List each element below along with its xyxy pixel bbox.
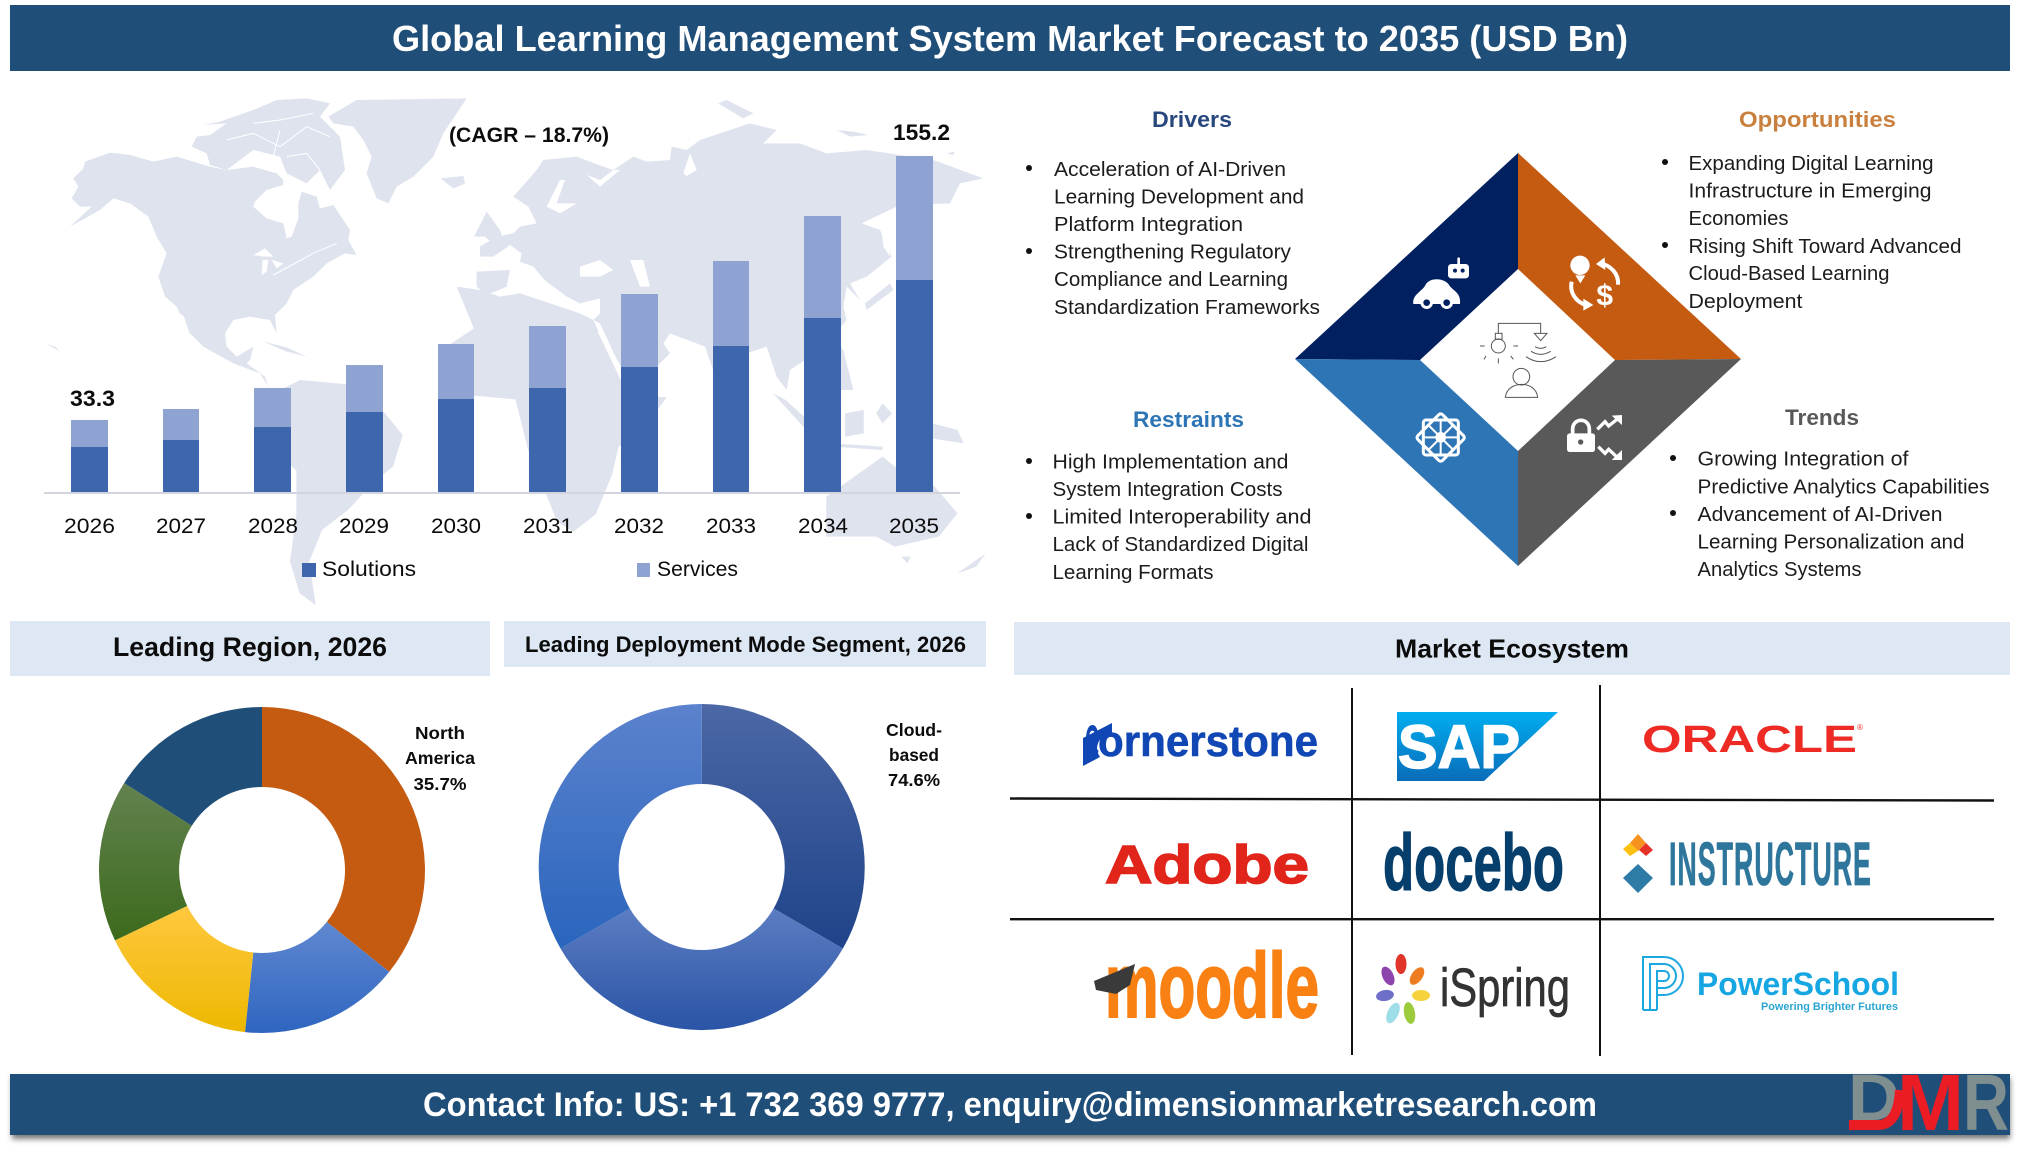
logo: DMR bbox=[1848, 1058, 2009, 1147]
logo: DMR: D bbox=[1848, 1060, 1900, 1134]
callout: cloud-based: based bbox=[889, 745, 939, 765]
trends block: Growing Integration of bbox=[1698, 448, 1909, 471]
restraints block: Learning Formats bbox=[1052, 561, 1214, 584]
year labels: 2026 bbox=[64, 514, 115, 538]
value label 2035: 155.2 bbox=[893, 120, 950, 145]
opportunities heading: Opportunities bbox=[1739, 107, 1896, 132]
CAGR label: (CAGR – 18.7%) bbox=[449, 123, 609, 147]
callout: cloud-based bbox=[886, 720, 942, 790]
callout: cloud-based: Cloud- bbox=[886, 720, 942, 740]
footer banner bbox=[10, 1058, 2010, 1147]
logo: powerschool: Powering Brighter Futures bbox=[1761, 1001, 1898, 1013]
logo: moodle bbox=[1094, 935, 1319, 1037]
panel: deployment mode bbox=[504, 621, 986, 1030]
drivers block: Strengthening Regulatory bbox=[1054, 241, 1292, 264]
year labels bbox=[64, 514, 939, 538]
panel: market ecosystem bbox=[1010, 622, 2010, 1056]
year labels: 2032 bbox=[614, 514, 664, 538]
icon: idea and money cycle: $ bbox=[1596, 279, 1613, 312]
year labels: 2027 bbox=[156, 514, 206, 538]
icon: lock and trend arrows bbox=[1567, 415, 1622, 460]
opportunities block: Expanding Digital Learning bbox=[1688, 152, 1934, 175]
heading: deployment mode: Leading Deployment Mode Segment, 2026 bbox=[525, 632, 966, 657]
drivers block bbox=[1026, 107, 1320, 319]
callout: North America: 35.7% bbox=[414, 774, 467, 794]
trends block: Learning Personalization and bbox=[1698, 530, 1964, 554]
drivers block: Compliance and Learning bbox=[1054, 268, 1288, 291]
icon: idea and money cycle bbox=[1570, 256, 1618, 312]
restraints heading: Restraints bbox=[1133, 407, 1244, 432]
logo: powerschool: PowerSchool bbox=[1697, 966, 1899, 1002]
logo: DMR: R bbox=[1963, 1058, 2009, 1147]
callout: North America: North bbox=[415, 723, 465, 743]
legend bbox=[302, 557, 738, 581]
year labels: 2035 bbox=[889, 514, 939, 538]
trends block: Analytics Systems bbox=[1698, 558, 1862, 581]
contact info: Contact Info: US: +1 732 369 9777, enquiry@dimensionmarketresearch.com bbox=[423, 1086, 1597, 1124]
year labels: 2030 bbox=[431, 514, 481, 538]
year labels: 2033 bbox=[706, 514, 756, 538]
logo: SAP: SAP bbox=[1398, 713, 1520, 781]
bars: solutions bbox=[71, 280, 933, 492]
callout: North America: America bbox=[405, 748, 475, 768]
donut chart: region bbox=[99, 707, 425, 1033]
restraints block: Lack of Standardized Digital bbox=[1052, 533, 1308, 556]
logo: ispring: iSpring bbox=[1440, 958, 1570, 1018]
opportunities block: Infrastructure in Emerging bbox=[1688, 180, 1932, 203]
restraints block: Limited Interoperability and bbox=[1052, 506, 1312, 529]
logo: ispring bbox=[1375, 954, 1570, 1025]
restraints block: System Integration Costs bbox=[1052, 478, 1282, 501]
drivers block: Acceleration of AI-Driven bbox=[1054, 158, 1286, 181]
restraints block: High Implementation and bbox=[1052, 450, 1288, 473]
opportunities block bbox=[1662, 107, 1962, 313]
legend: Services bbox=[657, 557, 738, 581]
logo: cornerstone: C bbox=[1085, 715, 1099, 771]
icon: robot car bbox=[1413, 257, 1469, 309]
panel: leading region bbox=[10, 621, 490, 1033]
drivers block: Standardization Frameworks bbox=[1054, 296, 1320, 319]
drivers block: Learning Development and bbox=[1054, 186, 1304, 208]
value label 2026: 33.3 bbox=[70, 386, 115, 411]
year labels: 2034 bbox=[798, 514, 848, 538]
logo: oracle: ® bbox=[1857, 723, 1863, 732]
trends heading: Trends bbox=[1785, 405, 1859, 430]
opportunities block: Economies bbox=[1688, 207, 1788, 230]
logo: oracle: ORACLE bbox=[1642, 719, 1857, 761]
logo: cornerstone: ornerstone bbox=[1098, 717, 1318, 766]
drivers block: Platform Integration bbox=[1054, 213, 1243, 236]
donut chart: deployment bbox=[539, 704, 865, 1030]
header banner bbox=[10, 5, 2010, 71]
title: Global Learning Management System Market Forecast to 2035 (USD Bn) bbox=[392, 18, 1628, 59]
legend: Solutions bbox=[322, 557, 416, 581]
logo: DMR: M bbox=[1897, 1058, 1964, 1147]
restraints block bbox=[1026, 407, 1312, 584]
year labels: 2028 bbox=[248, 514, 298, 538]
world map background bbox=[47, 98, 986, 605]
opportunities block: Cloud-Based Learning bbox=[1688, 262, 1890, 285]
logo: powerschool bbox=[1643, 957, 1899, 1013]
icon: gear flower bbox=[1416, 413, 1465, 462]
stacked bar chart bbox=[44, 120, 960, 581]
logo: moodle: moodle bbox=[1105, 935, 1319, 1037]
icon: center sensor and person bbox=[1480, 323, 1556, 397]
callout: cloud-based: 74.6% bbox=[888, 770, 940, 790]
trends block: Predictive Analytics Capabilities bbox=[1698, 475, 1990, 498]
logo: adobe: Adobe bbox=[1105, 835, 1309, 895]
year labels: 2029 bbox=[339, 514, 389, 538]
bars: services bbox=[71, 156, 933, 447]
year labels: 2031 bbox=[523, 514, 573, 538]
callout: North America bbox=[405, 723, 475, 794]
drivers heading: Drivers bbox=[1152, 107, 1232, 132]
trends block bbox=[1670, 405, 1990, 581]
logo: docebo: docebo bbox=[1383, 818, 1564, 907]
heading: leading region: Leading Region, 2026 bbox=[113, 632, 387, 662]
opportunities block: Deployment bbox=[1688, 290, 1803, 313]
heading: market ecosystem: Market Ecosystem bbox=[1395, 634, 1629, 664]
logo: instructure: INSTRUCTURE bbox=[1669, 829, 1871, 898]
trends block: Advancement of AI-Driven bbox=[1698, 503, 1942, 526]
diamond diagram bbox=[1295, 153, 1741, 566]
opportunities block: Rising Shift Toward Advanced bbox=[1688, 235, 1962, 258]
